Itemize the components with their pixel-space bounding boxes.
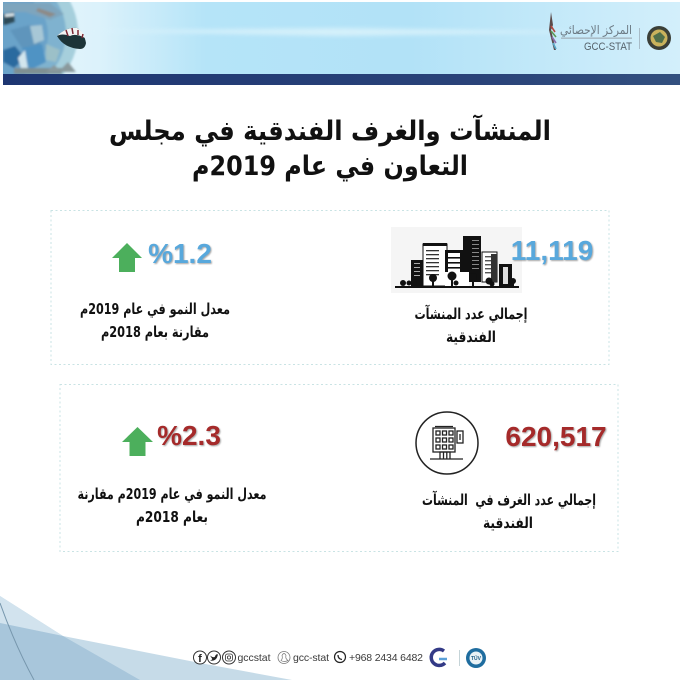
phone number: +968 2434 6482	[349, 652, 423, 664]
stat: growth 2.3: %2.3	[157, 420, 221, 451]
left black block	[411, 260, 423, 286]
icon: whatsapp	[334, 652, 346, 662]
label: rooms total	[422, 491, 596, 532]
logo: G mark	[431, 649, 447, 665]
white tower	[423, 244, 447, 286]
tall tower	[463, 236, 481, 282]
GCC-STAT logo	[549, 12, 671, 53]
title: المنشآت والغرف الفندقية في مجلس	[109, 114, 551, 147]
icon: snapchat	[278, 652, 290, 664]
footer contacts	[194, 648, 486, 668]
label: growth 2019 vs 2018: معدل النمو في عام 2019م مقارنة	[78, 485, 266, 503]
GCC-STAT logo: المركز الإحصائي	[560, 23, 632, 38]
label: establishments total: الفندقية	[446, 328, 496, 346]
far right block	[499, 264, 512, 286]
handle: gccstat: gccstat	[238, 652, 271, 664]
panel: hotel establishments	[51, 210, 609, 364]
trees	[400, 272, 516, 287]
stat: growth 1.2: %1.2	[148, 238, 212, 269]
label: establishments total: إجمالي عدد المنشآت	[414, 305, 528, 323]
light streak	[85, 28, 600, 36]
handle: gcc-stat: gcc-stat	[293, 652, 329, 664]
GCC-STAT logo: GCC-STAT	[584, 41, 632, 53]
icon: facebook	[194, 651, 206, 665]
icon: green up arrow	[112, 243, 142, 272]
decorative corner shapes	[0, 596, 292, 680]
label: growth 2019 vs 2018	[80, 300, 230, 341]
ground	[395, 286, 519, 288]
logo: TUV	[466, 648, 486, 668]
label: growth 2019 vs 2018: معدل النمو في عام 2019م	[80, 300, 230, 318]
icon: green up arrow	[122, 427, 153, 456]
city skyline icon	[391, 227, 522, 293]
title: التعاون في عام 2019م	[192, 151, 468, 182]
icon: twitter	[208, 651, 220, 664]
label: growth 2019 vs 2018: بعام 2018م	[136, 508, 208, 526]
panel: hotel rooms	[60, 384, 618, 552]
label: rooms total: إجمالي عدد الغرف في المنشآت	[422, 491, 596, 509]
stat: establishments total: 11,119	[511, 235, 593, 266]
label: growth 2019 vs 2018	[78, 485, 266, 526]
logo: TUV: TÜV	[471, 655, 482, 662]
icon: facebook: f	[198, 653, 202, 665]
stat: rooms total: 620,517	[505, 421, 607, 452]
seal	[647, 26, 671, 50]
label: growth 2019 vs 2018: مقارنة بعام 2018م	[101, 323, 209, 341]
globe collage	[3, 2, 79, 74]
right white building	[482, 252, 497, 282]
label: establishments total	[414, 305, 528, 346]
icon: instagram	[222, 651, 236, 664]
mid building	[445, 250, 465, 278]
parachute	[57, 28, 86, 49]
icon: hotel in circle	[416, 412, 478, 474]
title	[109, 114, 551, 182]
label: rooms total: الفندقية	[483, 514, 533, 532]
navy band	[3, 74, 680, 85]
ribbon	[549, 12, 556, 50]
header banner	[3, 2, 680, 85]
